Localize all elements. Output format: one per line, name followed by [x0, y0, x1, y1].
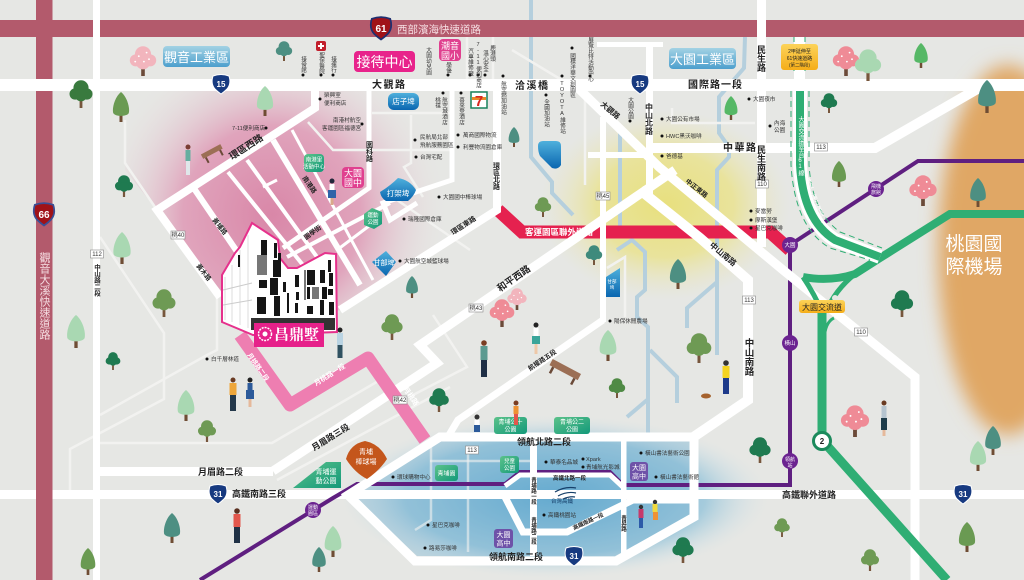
POI labels horizontal: 大園航空城籃球場	[404, 257, 449, 265]
road labels vertical	[92, 45, 766, 546]
label: Taoyuan International Airport	[945, 233, 1003, 278]
POI labels horizontal: 南港村航空	[333, 116, 361, 124]
MRT station nodes: 橫山	[784, 339, 796, 347]
POI labels horizontal: 大園公有市場	[666, 115, 700, 123]
pond chip: Dianzi: 店子埤	[392, 96, 415, 106]
road labels horizontal: 洽溪橋	[515, 79, 550, 92]
shield: expressway 61: 61	[375, 24, 387, 35]
icon: 7-Eleven logo	[471, 92, 487, 110]
people	[186, 144, 887, 543]
POI labels vertical: 國標洋華文創園區	[569, 53, 576, 98]
POI labels horizontal: 利豐物流園倉庫	[463, 143, 503, 151]
POI labels horizontal: 大園夜市	[753, 95, 776, 103]
road number signs	[90, 143, 868, 454]
POI labels horizontal: 7-11便利商店	[232, 124, 266, 132]
road number signs: 桃42	[394, 396, 407, 404]
chip: Qingpu baseball field: 棒球場	[356, 457, 376, 466]
road number signs: 桃43	[470, 304, 483, 312]
logo plate: Chang Ding Shu	[254, 323, 324, 347]
shield: national freeway 2	[814, 432, 830, 450]
pond chip: Dianzi	[388, 93, 419, 110]
logo plate: Chang Ding Shu: 昌鼎墅	[274, 326, 319, 344]
POI labels horizontal: 飛航服務園區	[420, 141, 454, 149]
water channels	[531, 0, 745, 437]
road labels rotated: 環區東路	[449, 214, 478, 237]
chip: Chaoyin Elementary: 潮音	[441, 40, 459, 51]
road labels rotated: 南港路	[300, 174, 319, 196]
chip: Qingpu sports park	[293, 462, 341, 488]
shields: provincial routes	[209, 74, 972, 566]
POI labels vertical	[300, 37, 634, 135]
MRT station nodes	[305, 181, 884, 518]
road labels rotated: 航權路五段	[526, 347, 558, 373]
POI labels vertical: 展覽比特活動中心	[587, 37, 594, 82]
chip: Dayuan High School south	[494, 529, 513, 548]
MRT station nodes: 領航	[785, 456, 795, 463]
POI labels horizontal: 華泰名品城	[550, 458, 578, 466]
POI labels horizontal: 白千層林道	[211, 355, 239, 363]
chip: Qingpu baseball field	[346, 441, 387, 479]
MRT station nodes: 大園	[784, 241, 796, 249]
POI labels horizontal: 台灣宅配	[420, 153, 443, 161]
MRT station nodes: 飛機	[871, 183, 881, 190]
POI labels horizontal: 大園國中棒球場	[443, 193, 483, 201]
chip: Nangang activity center: 南港里	[306, 156, 323, 164]
POI labels horizontal: 橫山書法藝術館	[660, 473, 700, 481]
airport freeway and interchange	[803, 214, 1024, 580]
chip: Dayuan Junior High: 國中	[344, 177, 362, 188]
road labels horizontal: 國際路一段	[688, 78, 743, 91]
road labels vertical: 青昇路	[620, 514, 627, 533]
road labels vertical: 圍科路	[366, 141, 373, 163]
chip: Dayuan High School south: 大園	[496, 530, 510, 539]
road labels rotated: 月桃路一段	[312, 362, 347, 388]
road number signs: 112	[92, 252, 102, 258]
chip: Chaoyin Elementary: 國小	[441, 51, 459, 61]
chip: Qingpu park 2: 青埔公二	[560, 418, 584, 426]
sign: freeway second stage notice: 61快速道路	[787, 55, 812, 62]
chip: sports park	[364, 208, 382, 229]
road labels horizontal: 高鐵北路一段	[553, 474, 587, 482]
icon: 7-Eleven logo: 7	[475, 93, 483, 110]
road labels horizontal: 月眉路二段	[198, 466, 243, 477]
road: lower white trunk under expressway	[0, 490, 1024, 499]
chip: Guanyin Industrial Park	[163, 46, 230, 67]
chip: Qingpu park 2	[554, 417, 590, 434]
shield: expressway 66: 66	[38, 210, 50, 221]
benches	[201, 144, 581, 386]
road labels vertical: 環區北路	[492, 162, 500, 191]
POI labels horizontal: 麥當勞	[755, 207, 772, 215]
chip: Nangang activity center: 活動中心	[303, 162, 325, 170]
chip: Dayuan High School north: 高中	[632, 472, 646, 480]
road labels rotated: 圓學街	[302, 223, 323, 242]
chip: Qingpu park 10: 青埔公十	[498, 418, 523, 426]
POI labels horizontal: 高鐵桃園站	[548, 511, 576, 519]
road labels rotated: 月桃路二段	[245, 351, 272, 383]
POI labels vertical: 喜來登酒店	[458, 96, 465, 126]
chip: Qingpu park 2: 公園	[566, 426, 578, 434]
chip: Chaoyin Elementary	[439, 39, 461, 61]
chip: Dayuan High School south: 高中	[496, 538, 510, 548]
POI labels vertical: 聖保醫院	[318, 52, 325, 76]
shield: national freeway 2: 2	[820, 437, 825, 446]
road number signs: 110	[757, 182, 767, 188]
label: Taoyuan International Airport: 際機場	[945, 256, 1003, 278]
shield: expressway 61	[371, 17, 391, 40]
sign: freeway second stage notice: 2甲延伸至	[788, 48, 811, 55]
chip: reception center	[354, 51, 415, 72]
label: planned freeway second stage: 路段(第二階段)	[803, 176, 826, 224]
logo: Taiwan High Speed Rail	[551, 488, 576, 505]
road labels horizontal: 高鐵聯外道路	[782, 489, 836, 500]
pond chip: Ganbu: 甘部埤	[374, 258, 394, 267]
POI labels vertical: 全國加油站	[543, 99, 550, 128]
sign: freeway second stage notice: (第二階段)	[789, 62, 810, 68]
chip: Qingpu park 10	[494, 417, 527, 434]
logo: Taiwan High Speed Rail: 台灣高鐵	[551, 497, 574, 505]
chip: children's park	[500, 456, 519, 473]
POI labels vertical: 溫心安全	[482, 49, 489, 73]
chip: sports park: 公園	[367, 219, 379, 226]
chip: Nangang activity center	[303, 154, 325, 172]
POI labels vertical: 大園公園	[627, 96, 634, 121]
chip: Qingpu sports park: 動公園	[316, 476, 336, 485]
chip: children's park: 兒童	[504, 457, 515, 465]
road number signs: 113	[744, 298, 754, 304]
label: planned freeway link: 大園交流道至台61線	[797, 115, 804, 176]
chip: Qingpu baseball field: 青埔	[359, 447, 373, 456]
POI labels horizontal: 便利商店	[324, 99, 347, 107]
POI labels horizontal: 橫山書法藝術公園	[645, 449, 690, 457]
MRT station nodes: 站	[787, 462, 793, 469]
road labels vertical: 青埔路一段	[530, 476, 537, 506]
chip: Dayuan Junior High	[342, 167, 364, 188]
building: Chang Ding Shu tower	[222, 223, 337, 335]
POI labels vertical: 航空城酒店	[441, 96, 448, 126]
icon: hospital cross	[316, 41, 326, 51]
label: expressway 61: 西部濱海快速道路	[397, 23, 481, 36]
POI labels horizontal: 民航局北部	[420, 133, 448, 141]
label: expressway 66: 觀音大溪快速道路	[38, 252, 50, 341]
chip: Qingpu garden	[435, 465, 458, 481]
road labels rotated: 黃埔路	[210, 216, 230, 237]
road labels horizontal: 高鐵南路三段	[232, 488, 286, 499]
road number signs: 桃40	[172, 231, 185, 239]
minor roads	[70, 37, 755, 552]
label: Taoyuan International Airport: 桃園國	[945, 233, 1003, 255]
POI dots	[206, 46, 772, 550]
road labels rotated: 中山南路	[708, 240, 739, 268]
road labels rotated: 黃木路	[194, 262, 214, 283]
POI labels horizontal: 環球購物中心	[397, 473, 431, 481]
road labels rotated: 月眉路三段	[310, 421, 352, 453]
pond chip: Dajia	[380, 178, 416, 201]
road labels rotated	[194, 99, 739, 532]
road labels horizontal: 客運園區聯外道路	[525, 227, 594, 237]
road labels vertical: 民生南路	[756, 145, 766, 182]
POI labels horizontal: HWC黑沃咖啡	[666, 132, 702, 140]
zone: yellow central district	[540, 110, 790, 300]
road labels horizontal: 領航南路二段	[489, 551, 543, 562]
chip: Dayuan Junior High: 大園	[344, 168, 362, 178]
road labels rotated: 環區西路	[227, 131, 266, 163]
chip: Qingpu park 10: 公園	[504, 426, 517, 434]
road labels rotated: 中正東路	[684, 176, 710, 200]
POI labels vertical: 大園幼兒園	[425, 46, 432, 76]
pond chip: Ganbu	[372, 251, 396, 276]
chip: Qingpu sports park: 青埔運	[316, 467, 336, 476]
POI labels horizontal: 爸德基	[666, 152, 683, 160]
POI labels horizontal: 陽保休閒農場	[614, 317, 648, 325]
road labels horizontal	[198, 78, 836, 562]
road: planned freeway link with dashed edges	[791, 37, 882, 260]
road labels vertical: 民生路	[756, 45, 766, 73]
road labels horizontal: 大觀路	[372, 78, 406, 91]
zone: pink residential district	[130, 91, 418, 310]
road labels rotated: 大觀路	[599, 99, 623, 121]
POI labels horizontal: 摩斯漢堡	[755, 216, 778, 224]
POI labels vertical: 接運行	[330, 55, 337, 74]
POI labels horizontal: 客運園區福德宮	[322, 124, 362, 132]
road number signs: 113	[816, 145, 826, 151]
zone: blue high-speed-rail district	[340, 415, 770, 579]
shields: provincial routes: 15	[217, 80, 226, 89]
chip: sports park: 運動	[367, 211, 379, 219]
POI labels vertical: 桃禧	[434, 96, 441, 110]
POI labels vertical: TOYOTA維修站	[559, 81, 566, 135]
road labels rotated: 和平西路	[495, 263, 533, 294]
road labels vertical: 青埔路二段	[530, 516, 537, 546]
POI labels horizontal: 路易莎咖啡	[429, 544, 457, 552]
POI labels horizontal: Xpark	[586, 457, 601, 463]
POI labels vertical: 汽車維修廠	[467, 47, 474, 77]
shields: provincial routes: 31	[570, 552, 579, 561]
sign: Dayuan interchange: 大園交流道	[802, 302, 842, 312]
road: crimson airport link	[498, 210, 790, 250]
chip: Guanyin Industrial Park: 觀音工業區	[164, 50, 229, 65]
POI labels vertical: 接骨館	[300, 55, 307, 74]
road number signs: 桃45	[597, 192, 610, 200]
chip: reception center: 接待中心	[356, 54, 412, 70]
POI labels horizontal: 榮興室	[324, 91, 341, 99]
sign: freeway second stage notice	[781, 44, 818, 70]
pond chip: Ganbu vertical: 埤	[610, 284, 615, 291]
POI labels horizontal: 萬商國際物流	[463, 131, 497, 139]
road labels vertical: 中山路二段	[92, 263, 101, 298]
shields: provincial routes: 31	[959, 490, 968, 499]
route: airport MRT purple line	[200, 161, 1024, 580]
pond: unnamed blue	[538, 141, 561, 169]
shield: expressway 66	[34, 203, 54, 226]
chip: Dayuan High School north	[630, 462, 648, 481]
POI labels horizontal: 星巴克咖啡	[432, 521, 460, 529]
MRT station nodes: 運動	[308, 504, 318, 511]
POI labels vertical: 7-11便利商店	[475, 42, 482, 90]
chip: Dayuan High School north: 大園	[632, 463, 646, 472]
MRT station nodes: 園區	[308, 511, 318, 517]
pond chip: Ganbu vertical	[606, 268, 620, 297]
POI labels horizontal	[211, 91, 786, 552]
shields: provincial routes: 15	[636, 80, 645, 89]
pink access roads to the site	[240, 335, 425, 440]
shields: provincial routes: 31	[214, 490, 223, 499]
chip: Dayuan Industrial Park	[669, 48, 736, 69]
road number signs: 113	[467, 448, 477, 454]
road labels horizontal: 領航北路二段	[517, 436, 571, 447]
road labels rotated: 月桃路	[401, 385, 421, 407]
road number signs: 110	[856, 330, 866, 336]
POI labels horizontal: 青埔航光影城	[586, 463, 620, 471]
chip: children's park: 公園	[504, 465, 515, 472]
sign: Dayuan interchange	[799, 300, 845, 313]
chip: Dayuan Industrial Park: 大園工業區	[670, 52, 735, 67]
road labels vertical: 中山北路	[644, 102, 654, 136]
POI labels horizontal: 公園	[774, 127, 786, 134]
road labels rotated: 高鐵南路一段	[571, 510, 605, 532]
POI labels horizontal: 內海	[774, 119, 786, 127]
chip: Qingpu garden: 青埔園	[437, 470, 456, 478]
POI labels horizontal: 瑞隆國際倉庫	[408, 215, 442, 223]
POI labels vertical: 鹿港頭	[489, 44, 496, 63]
POI labels vertical: 學優	[445, 61, 452, 75]
POI labels horizontal: 星巴克咖啡	[755, 224, 783, 232]
POI labels vertical: 航空燃加油站	[500, 80, 507, 116]
road labels horizontal: 中華路	[723, 141, 758, 154]
road labels vertical: 中山南路	[742, 337, 754, 377]
zone: airport orange area	[938, 65, 1024, 435]
pond chip: Ganbu vertical: 甘部	[608, 278, 617, 285]
MRT station nodes: 旅館	[871, 189, 881, 196]
pond chip: Dajia: 打架埤	[387, 188, 410, 198]
